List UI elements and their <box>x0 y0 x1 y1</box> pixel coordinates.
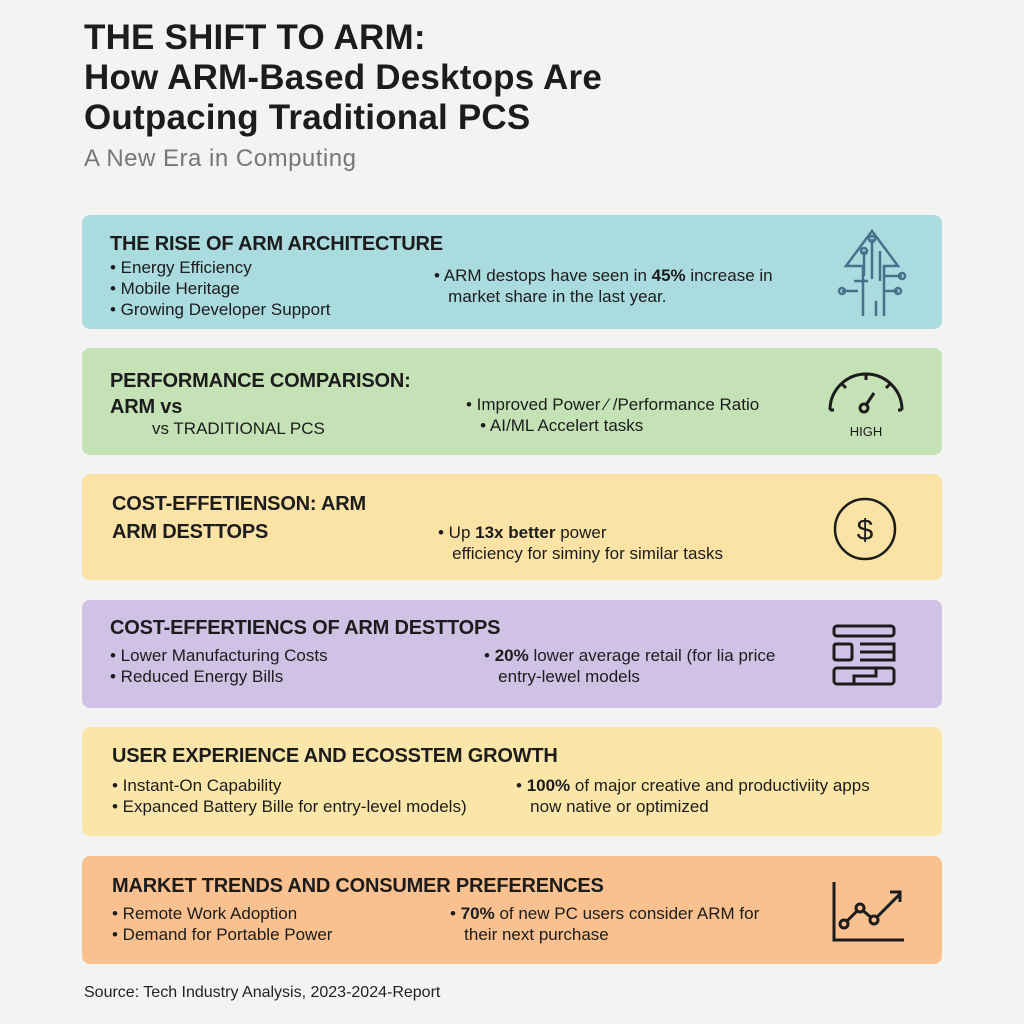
heading <box>110 370 411 418</box>
heading: COST-EFFERTIENCS OF ARM DESTTOPS <box>110 617 500 639</box>
bullets: • Growing Developer Support <box>110 300 330 319</box>
stat: • ARM destops have seen in 45% increase in <box>434 266 773 285</box>
stat <box>434 266 773 306</box>
bullets: • Remote Work Adoption <box>112 904 297 923</box>
bullets: • Lower Manufacturing Costs <box>110 646 328 665</box>
stat <box>450 904 759 944</box>
stat: • Up 13x better power <box>438 523 606 542</box>
bullets: • Demand for Portable Power <box>112 925 332 944</box>
stat <box>516 776 870 816</box>
stat: • 100% of major creative and productiviity apps <box>516 776 870 795</box>
stat: • 70% of new PC users consider ARM for <box>450 904 759 923</box>
bullets: • Expanced Battery Bille for entry-level models) <box>112 797 467 816</box>
panel: cost-effectiveness 1 <box>82 474 942 580</box>
icon: dollar <box>834 498 896 560</box>
title <box>84 18 602 137</box>
icon: dollar: $ <box>857 514 874 547</box>
stat: entry-lewel models <box>498 667 640 686</box>
panel: performance <box>82 348 942 455</box>
heading: ARM vs <box>110 396 182 418</box>
title: THE SHIFT TO ARM: <box>84 18 426 57</box>
heading: PERFORMANCE COMPARISON: <box>110 370 411 392</box>
subtitle: A New Era in Computing <box>84 145 356 172</box>
bullets <box>466 395 759 435</box>
icon: circuit arrow <box>838 229 906 316</box>
stat: • 20% lower average retail (for lia price <box>484 646 775 665</box>
heading: USER EXPERIENCE AND ECOSSTEM GROWTH <box>112 745 558 767</box>
panel: rise of ARM <box>82 215 942 329</box>
icon: gauge <box>828 372 904 439</box>
heading: COST-EFFETIENSON: ARM <box>112 493 366 515</box>
bullets <box>112 776 467 816</box>
heading: ARM DESTTOPS <box>112 521 268 543</box>
icon: layout <box>832 624 896 686</box>
bullets <box>110 258 330 319</box>
source: Source: Tech Industry Analysis, 2023-2024-Report <box>84 984 440 1001</box>
bullets <box>112 904 332 944</box>
bullets: • Reduced Energy Bills <box>110 667 283 686</box>
stat: their next purchase <box>464 925 609 944</box>
subheading: vs TRADITIONAL PCS <box>152 419 325 438</box>
stat <box>438 523 723 563</box>
icon: line chart <box>832 882 904 942</box>
title: How ARM-Based Desktops Are <box>84 58 602 97</box>
stat: market share in the last year. <box>448 287 666 306</box>
stat: now native or optimized <box>530 797 709 816</box>
bullets: • AI/ML Accelert tasks <box>480 416 643 435</box>
heading: MARKET TRENDS AND CONSUMER PREFERENCES <box>112 875 604 897</box>
stat <box>484 646 775 686</box>
panel: user experience <box>82 727 942 836</box>
bullets: • Mobile Heritage <box>110 279 240 298</box>
heading <box>112 493 366 543</box>
bullets <box>110 646 328 686</box>
heading: THE RISE OF ARM ARCHITECTURE <box>110 233 443 255</box>
stat: efficiency for siminy for similar tasks <box>452 544 723 563</box>
bullets: • Improved Power ⁄ /Performance Ratio <box>466 395 759 414</box>
title: Outpacing Traditional PCS <box>84 98 530 137</box>
panel: market trends <box>82 856 942 964</box>
bullets: • Energy Efficiency <box>110 258 252 277</box>
panel: cost-effectiveness 2 <box>82 600 942 708</box>
bullets: • Instant-On Capability <box>112 776 281 795</box>
icon: gauge: HIGH <box>850 424 882 439</box>
